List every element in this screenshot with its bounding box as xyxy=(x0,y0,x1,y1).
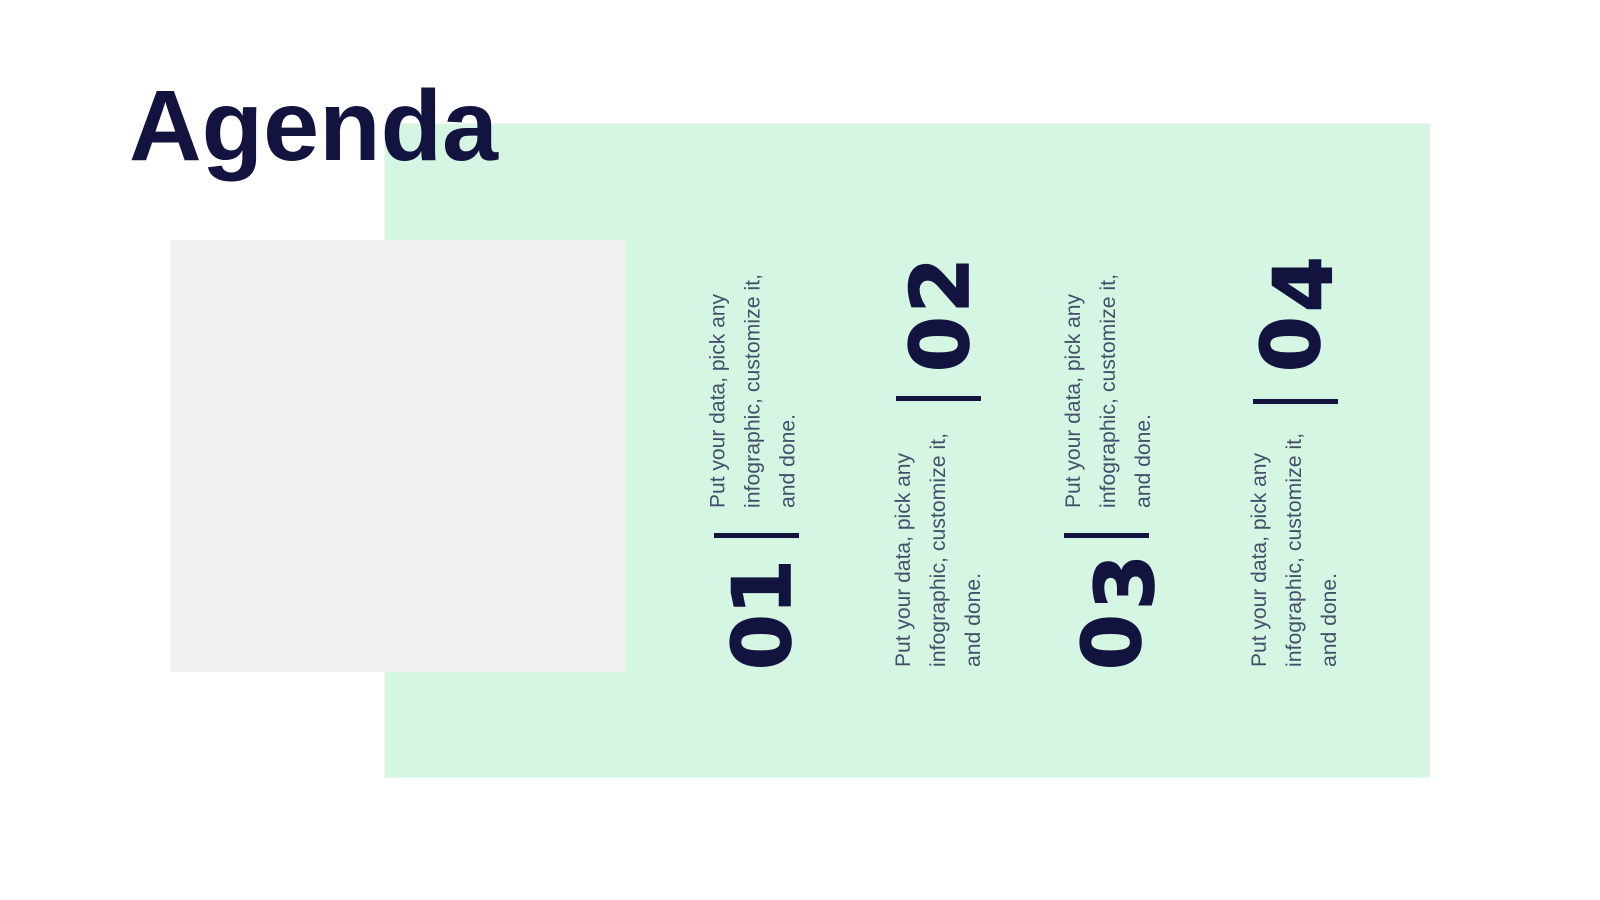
description 04: infographic, customize it, xyxy=(1282,433,1306,667)
agenda item 03 xyxy=(1061,274,1172,670)
description 03: and done. xyxy=(1131,414,1155,508)
description 01: infographic, customize it, xyxy=(740,274,764,508)
panel: green background xyxy=(384,124,1430,778)
description 02: infographic, customize it, xyxy=(926,433,950,667)
agenda item 02 xyxy=(891,257,987,667)
agenda item 04 xyxy=(1245,256,1350,667)
panel: grey image placeholder xyxy=(170,240,625,672)
description 03: infographic, customize it, xyxy=(1096,274,1120,508)
divider 03 xyxy=(1064,533,1149,538)
agenda item 01 xyxy=(706,274,809,670)
description 03: Put your data, pick any xyxy=(1061,294,1085,508)
description 02 xyxy=(891,433,985,667)
description 03 xyxy=(1061,274,1155,508)
number 01: 01 xyxy=(716,559,809,670)
description 04: and done. xyxy=(1317,573,1341,667)
title: Agenda xyxy=(129,70,499,182)
divider 02 xyxy=(896,396,981,401)
description 04: Put your data, pick any xyxy=(1247,453,1271,667)
description 04 xyxy=(1247,433,1341,667)
divider 04 xyxy=(1253,399,1338,404)
description 01: Put your data, pick any xyxy=(706,294,730,508)
number 02: 02 xyxy=(894,257,987,372)
description 01: and done. xyxy=(776,414,800,508)
divider 01 xyxy=(714,533,799,538)
number 03: 03 xyxy=(1066,554,1172,670)
number 04: 04 xyxy=(1245,256,1350,372)
description 01 xyxy=(706,274,800,508)
description 02: Put your data, pick any xyxy=(891,453,915,667)
description 02: and done. xyxy=(961,573,985,667)
